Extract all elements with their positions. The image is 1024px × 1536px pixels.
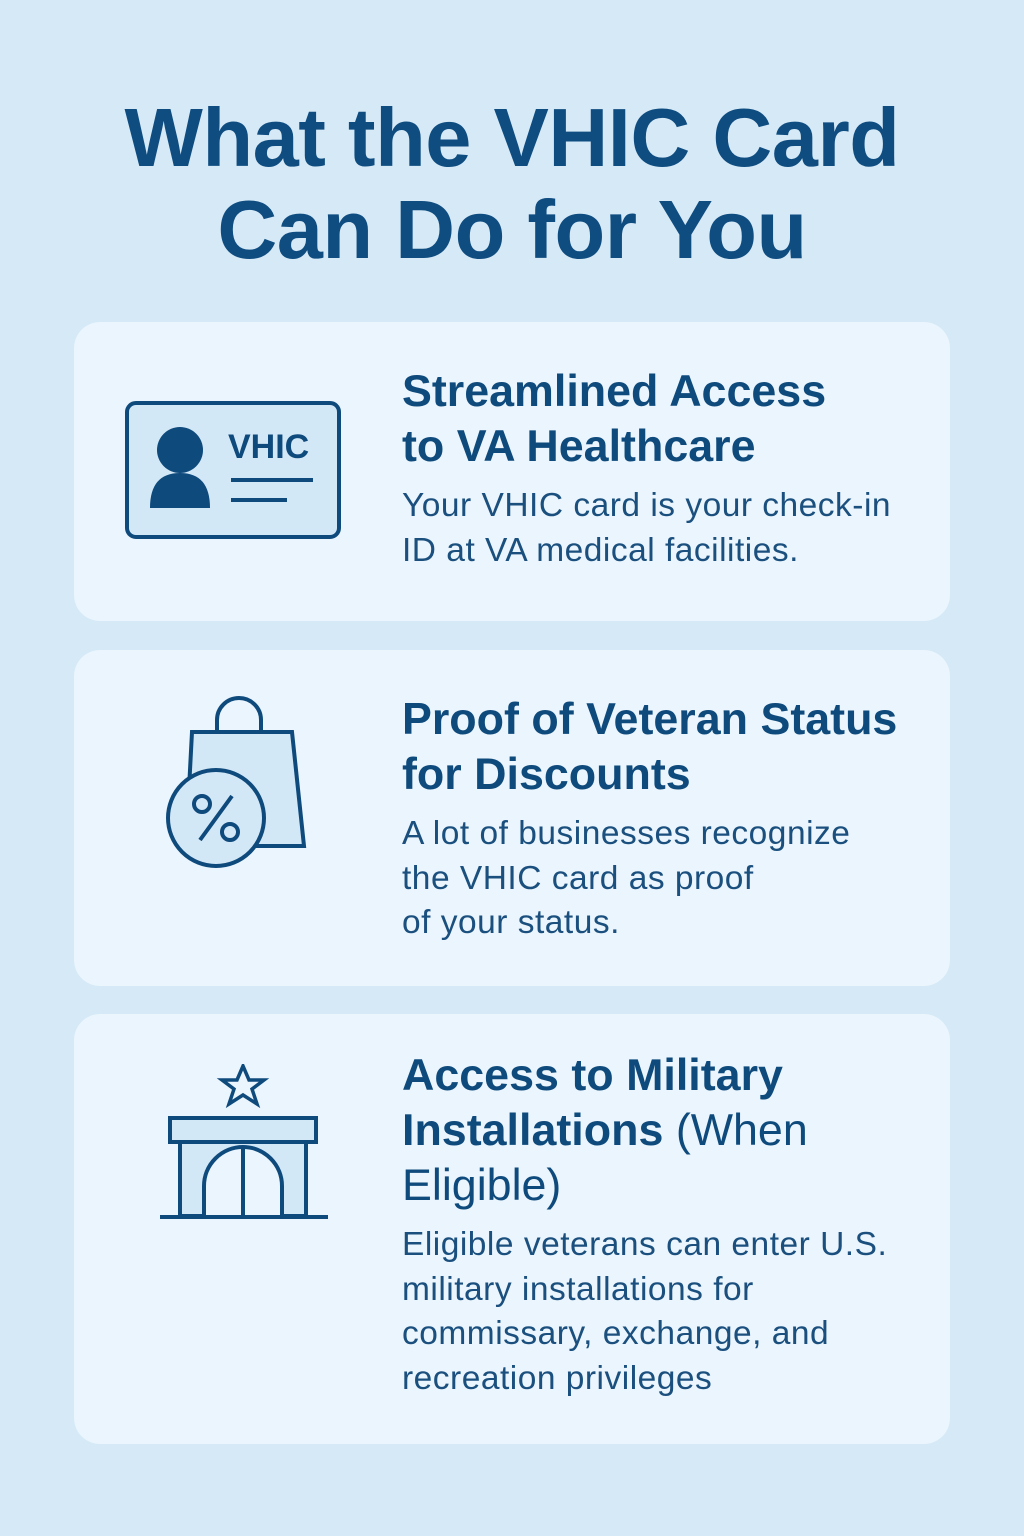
text: installations: commissary, exchange, and	[402, 1315, 829, 1352]
text: installations: Installations (When	[402, 1105, 808, 1155]
text: healthcare: Streamlined Access	[402, 366, 826, 416]
text: healthcare	[402, 366, 891, 568]
icon: VHIC card: VHIC	[228, 428, 309, 466]
text: installations: military installations for	[402, 1270, 754, 1308]
icon: shopping bag with percent	[166, 696, 306, 868]
text: discounts: A lot of businesses recognize	[402, 815, 850, 852]
title	[124, 91, 899, 276]
panel: discounts	[74, 650, 950, 986]
text: discounts: of your status.	[402, 904, 620, 941]
text: healthcare: ID at VA medical facilities.	[402, 532, 799, 568]
text: installations: Access to Military	[402, 1050, 783, 1100]
text: installations: recreation privileges	[402, 1360, 712, 1396]
text: healthcare: Your VHIC card is your check-in	[402, 487, 891, 524]
text: installations: Eligible)	[402, 1160, 561, 1210]
title: Can Do for You	[217, 183, 807, 276]
text: discounts: the VHIC card as proof	[402, 860, 754, 896]
text: discounts: for Discounts	[402, 749, 691, 799]
text: discounts: Proof of Veteran Status	[402, 694, 897, 744]
icon: VHIC card	[125, 401, 341, 539]
text: installations: Eligible veterans can enter U.S.	[402, 1226, 887, 1263]
text: healthcare: to VA Healthcare	[402, 421, 756, 471]
text: installations	[402, 1050, 887, 1396]
panel: military installations	[74, 1014, 950, 1444]
panel: healthcare	[74, 322, 950, 621]
icon: installation building	[160, 1064, 328, 1219]
title: What the VHIC Card	[125, 91, 899, 184]
text: discounts	[402, 694, 897, 941]
